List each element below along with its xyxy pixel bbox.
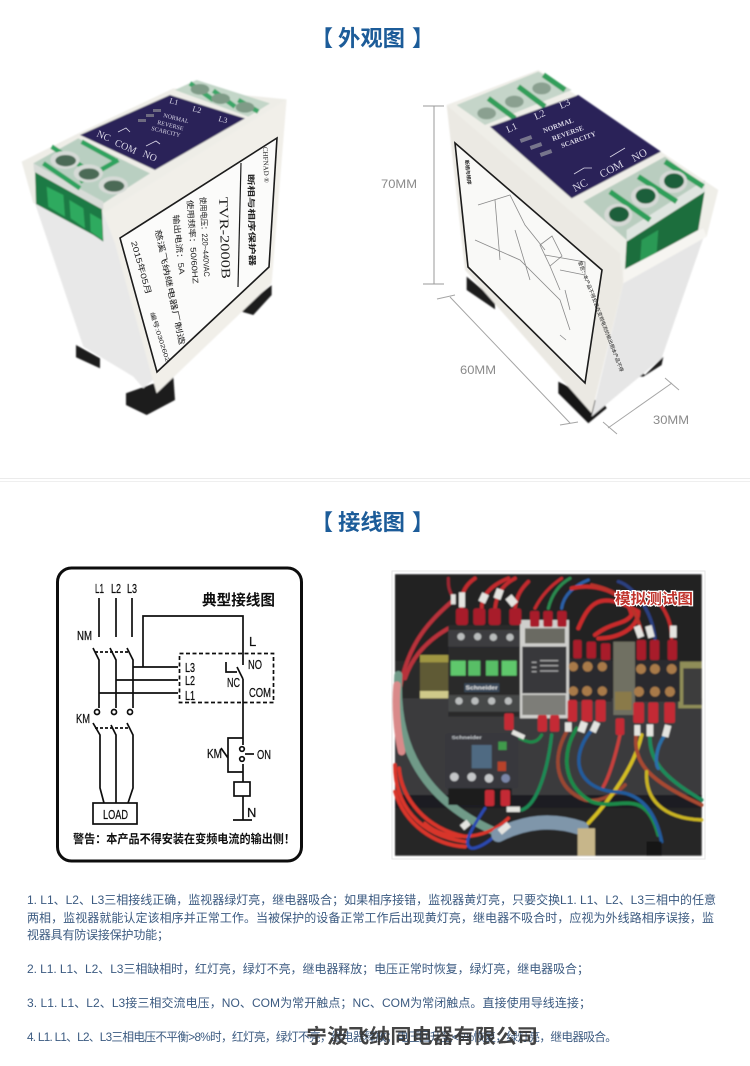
product photo: relay left view <box>22 80 287 415</box>
relay left: panel and label markings: 2015年05月 <box>129 240 154 295</box>
circuit labels: L1 <box>95 581 104 596</box>
relay left: panel and label markings: REVERSE <box>157 120 184 132</box>
circuit labels: L2 <box>185 673 195 688</box>
relay left: panel and label markings: L2 <box>191 104 202 115</box>
wiring diagram panel <box>58 568 302 861</box>
relay right: panel and label markings: SCARCITY <box>560 130 597 150</box>
relay left: panel and label markings: 编号:0302602 <box>148 311 172 364</box>
circuit labels: L2 <box>111 581 121 596</box>
heading: wiring diagram: 】 <box>412 510 434 535</box>
circuit labels <box>76 581 271 822</box>
dimension: 70MM <box>381 106 444 284</box>
heading: appearance: 外观图 <box>338 26 405 51</box>
warning text: 警告：本产品不得安装在变频电流的输出侧！ <box>73 831 295 846</box>
test photo panel <box>392 571 705 859</box>
item 1: 两相，监视器就能认定该相序并正常工作。当被保护的设备正常工作后出现黄灯亮，继电器不吸合时，应视为外线路相序误接，监 <box>27 910 714 925</box>
relay right: panel and label markings: L2 <box>533 108 547 123</box>
item 1: 1. L1、L2、L3三相接线正确，监视器绿灯亮，继电器吸合；如果相序接错，监视器黄灯亮，只要交换L1. L1、L2、L3三相中的任意 <box>27 892 716 907</box>
circuit labels: L1 <box>185 688 195 703</box>
circuit labels: COM <box>249 685 271 700</box>
dimension: 70MM: 70MM <box>381 177 417 191</box>
relay right: panel and label markings: COM <box>598 158 626 181</box>
circuit labels: L3 <box>127 581 137 596</box>
circuit labels: NM <box>77 628 92 643</box>
terminal blocks <box>569 658 612 702</box>
circuit labels: KM <box>207 746 222 761</box>
heading: wiring diagram: 【 <box>311 510 333 535</box>
item 3: 3. L1. L1、L2、L3接三相交流电压，NO、COM为常开触点；NC、COM为常闭触点。直接使用导线连接； <box>27 995 591 1010</box>
heading: appearance <box>311 26 434 51</box>
relay left: panel and label markings <box>95 96 277 372</box>
relay left: panel and label markings: NC <box>95 129 112 145</box>
phase relay <box>520 620 569 718</box>
contactor <box>448 625 520 717</box>
relay left: panel and label markings: NO <box>141 149 158 165</box>
dimension: 60MM: 60MM <box>460 363 496 377</box>
item 2: 2. L1. L1、L2、L3三相缺相时，红灯亮，绿灯不亮，继电器释放；电压正常时恢复，绿灯亮，继电器吸合； <box>27 961 589 976</box>
circuit labels: L3 <box>185 660 195 675</box>
circuit labels: ON <box>257 747 271 762</box>
relay left: panel and label markings: TVR-2000B <box>216 197 234 279</box>
relay left: panel and label markings: L3 <box>217 114 228 125</box>
circuit lines <box>93 598 274 824</box>
heading: wiring diagram: 接线图 <box>338 510 405 535</box>
photo caption: 模拟测试图 <box>615 590 693 608</box>
circuit labels: N <box>247 805 256 820</box>
circuit labels: KM <box>76 711 90 726</box>
relay right: panel and label markings: NO <box>630 147 649 165</box>
relay right: panel and label markings: NORMAL <box>542 116 575 135</box>
relay left: panel and label markings: 使用频率：50/60HZ <box>185 199 201 284</box>
dimension: 30MM <box>603 378 689 434</box>
heading: appearance: 】 <box>412 26 434 51</box>
watermark company name: 宁波飞纳同电器有限公司 <box>306 1024 538 1048</box>
relay left: panel and label markings: 断相与相序保护器 <box>246 174 258 266</box>
dimension: 30MM: 30MM <box>653 413 689 427</box>
item 1: 视器具有防误接保护功能； <box>27 927 169 942</box>
relay right: panel and label markings: REVERSE <box>551 124 585 143</box>
wire tags <box>451 588 677 835</box>
relay left: panel and label markings: CHFNAD ® <box>261 147 270 184</box>
relay left: panel and label markings: 使用电压：220~440VAC <box>198 197 212 277</box>
product photo: relay right view <box>447 70 718 423</box>
relay left: panel and label markings: COM <box>113 138 138 157</box>
item 1 <box>27 892 716 942</box>
relay left: panel and label markings: 输出电流：5A <box>171 214 187 276</box>
overload relay <box>445 733 518 788</box>
circuit labels: LOAD <box>103 807 128 822</box>
relay right: panel and label markings: 警告：本产品不得安装在变频电流的输出侧本产品不得 <box>576 260 625 373</box>
circuit labels: NO <box>248 657 262 672</box>
crimp lugs <box>456 608 677 806</box>
diagram title: 典型接线图 <box>202 591 275 609</box>
relay right: panel and label markings: L1 <box>505 121 519 136</box>
circuit labels: L <box>249 634 256 649</box>
relay left: panel and label markings: NORMAL <box>163 113 190 125</box>
photo of wired cabinet: Schneider <box>452 735 482 741</box>
photo of wired cabinet: Schneider <box>466 686 499 692</box>
item 4: 4. L1. L1、L2、L3三相电压不平衡>8%时，红灯亮，绿灯不亮，继电器释放；电压回升至<5%恢复，绿灯亮，继电器吸合。 <box>27 1030 617 1044</box>
relay right: panel and label markings: L3 <box>558 97 572 112</box>
relay right: panel and label markings <box>455 97 649 383</box>
dimension: 60MM <box>437 295 578 425</box>
relay right: panel and label markings: NC <box>571 177 590 195</box>
photo of wired cabinet <box>395 574 702 856</box>
relay right: panel and label markings: 断相与相序 <box>463 159 473 185</box>
instructions text <box>27 892 716 1048</box>
heading: wiring diagram <box>311 510 434 535</box>
relay left: panel and label markings: SCARCITY <box>151 126 181 139</box>
relay left: panel and label markings: L1 <box>168 96 179 107</box>
circuit labels: NC <box>227 675 240 690</box>
heading: appearance: 【 <box>311 26 333 51</box>
circuit sketch on label <box>475 195 585 340</box>
relay left: panel and label markings: 慈溪飞纳继电器厂制造 <box>153 228 187 346</box>
